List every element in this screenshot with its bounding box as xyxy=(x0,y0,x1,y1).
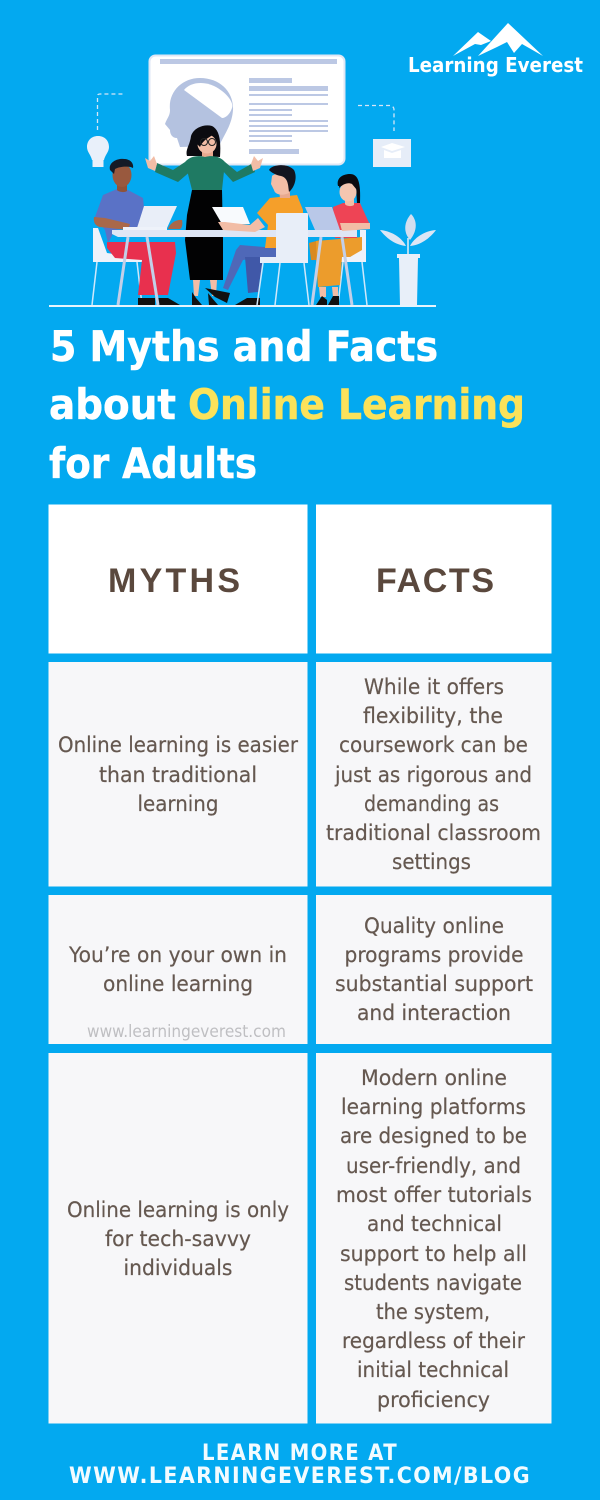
panel: fact 3: and technical xyxy=(367,1212,502,1237)
title: Online Learning xyxy=(188,380,525,429)
footer call to action xyxy=(69,1441,531,1489)
panel: myth 3: individuals xyxy=(124,1256,232,1281)
panel: fact 2: programs provide xyxy=(344,943,524,968)
panel: myths header xyxy=(48,504,308,654)
panel: fact 2 xyxy=(316,895,552,1044)
illustration: team meeting xyxy=(49,56,436,307)
chair in front xyxy=(257,213,309,305)
icon: graduation cap card xyxy=(358,106,411,167)
logo: Learning Everest xyxy=(408,23,583,77)
panel: fact 1: flexibility, the xyxy=(363,704,503,729)
title xyxy=(49,322,525,488)
panel: myth 1: Online learning is easier xyxy=(58,733,298,758)
person: man in blue shirt xyxy=(92,159,182,305)
panel: fact 3: learning platforms xyxy=(341,1095,526,1120)
panel: fact 1: demanding as xyxy=(364,792,499,817)
panel: myth 1: learning xyxy=(138,792,218,817)
panel: myth 3: Online learning is only xyxy=(67,1198,289,1223)
title: 5 Myths and Facts xyxy=(50,322,438,371)
title: for Adults xyxy=(49,439,257,488)
panel: myth 3 xyxy=(48,1053,308,1424)
panel: fact 2: substantial support xyxy=(335,972,533,997)
panel: fact 3: are designed to be xyxy=(340,1124,527,1149)
panel: fact 2: and interaction xyxy=(357,1001,511,1026)
person: man in orange shirt xyxy=(205,165,303,305)
panel: facts header: FACTS xyxy=(376,562,494,600)
person: teacher xyxy=(145,125,263,305)
panel: myth 3: for tech-savvy xyxy=(105,1227,251,1252)
panel: fact 1 xyxy=(316,662,552,886)
panel: fact 3 xyxy=(316,1053,552,1424)
footer call to action: WWW.LEARNINGEVEREST.COM/BLOG xyxy=(69,1464,531,1489)
panel: fact 1: traditional classroom xyxy=(326,821,541,846)
panel: myth 2: You’re on your own in xyxy=(68,943,287,968)
panel: fact 2: Quality online xyxy=(364,914,504,939)
panel: myths header: MYTHS xyxy=(108,562,240,600)
person: woman in red shirt xyxy=(309,174,370,305)
panel: myth 1: than traditional xyxy=(99,763,257,788)
panel: fact 3: Modern online xyxy=(361,1066,507,1091)
panel: fact 1: coursework can be xyxy=(339,733,528,758)
icon: light bulb xyxy=(87,94,123,167)
panel: myth 2: online learning xyxy=(103,972,253,997)
panel: fact 1: settings xyxy=(392,850,471,875)
watermark: www.learningeverest.com xyxy=(87,1022,286,1042)
logo: Learning Everest: Learning Everest xyxy=(408,53,583,77)
panel: myth 1 xyxy=(48,662,308,886)
laptops and table xyxy=(112,206,370,305)
panel: fact 3: support to help all xyxy=(340,1242,527,1267)
floor line xyxy=(49,305,436,307)
panel: fact 1: While it offers xyxy=(364,675,504,700)
panel: fact 3: regardless of their xyxy=(342,1329,525,1354)
presentation board xyxy=(150,56,344,164)
panel: fact 3: the system, xyxy=(376,1300,490,1325)
panel: fact 3: user-friendly, and xyxy=(346,1154,521,1179)
panel: fact 3: initial technical xyxy=(357,1358,509,1383)
panel: fact 3: proficiency xyxy=(377,1388,490,1413)
title: about xyxy=(49,380,176,429)
panel: fact 3: most offer tutorials xyxy=(336,1183,532,1208)
panel: fact 3: students navigate xyxy=(344,1271,522,1296)
panel: facts header xyxy=(316,504,552,654)
panel: myth 2 xyxy=(48,895,308,1044)
plant xyxy=(380,214,436,305)
panel: fact 1: just as rigorous and xyxy=(334,763,532,788)
footer call to action: LEARN MORE AT xyxy=(202,1441,398,1466)
